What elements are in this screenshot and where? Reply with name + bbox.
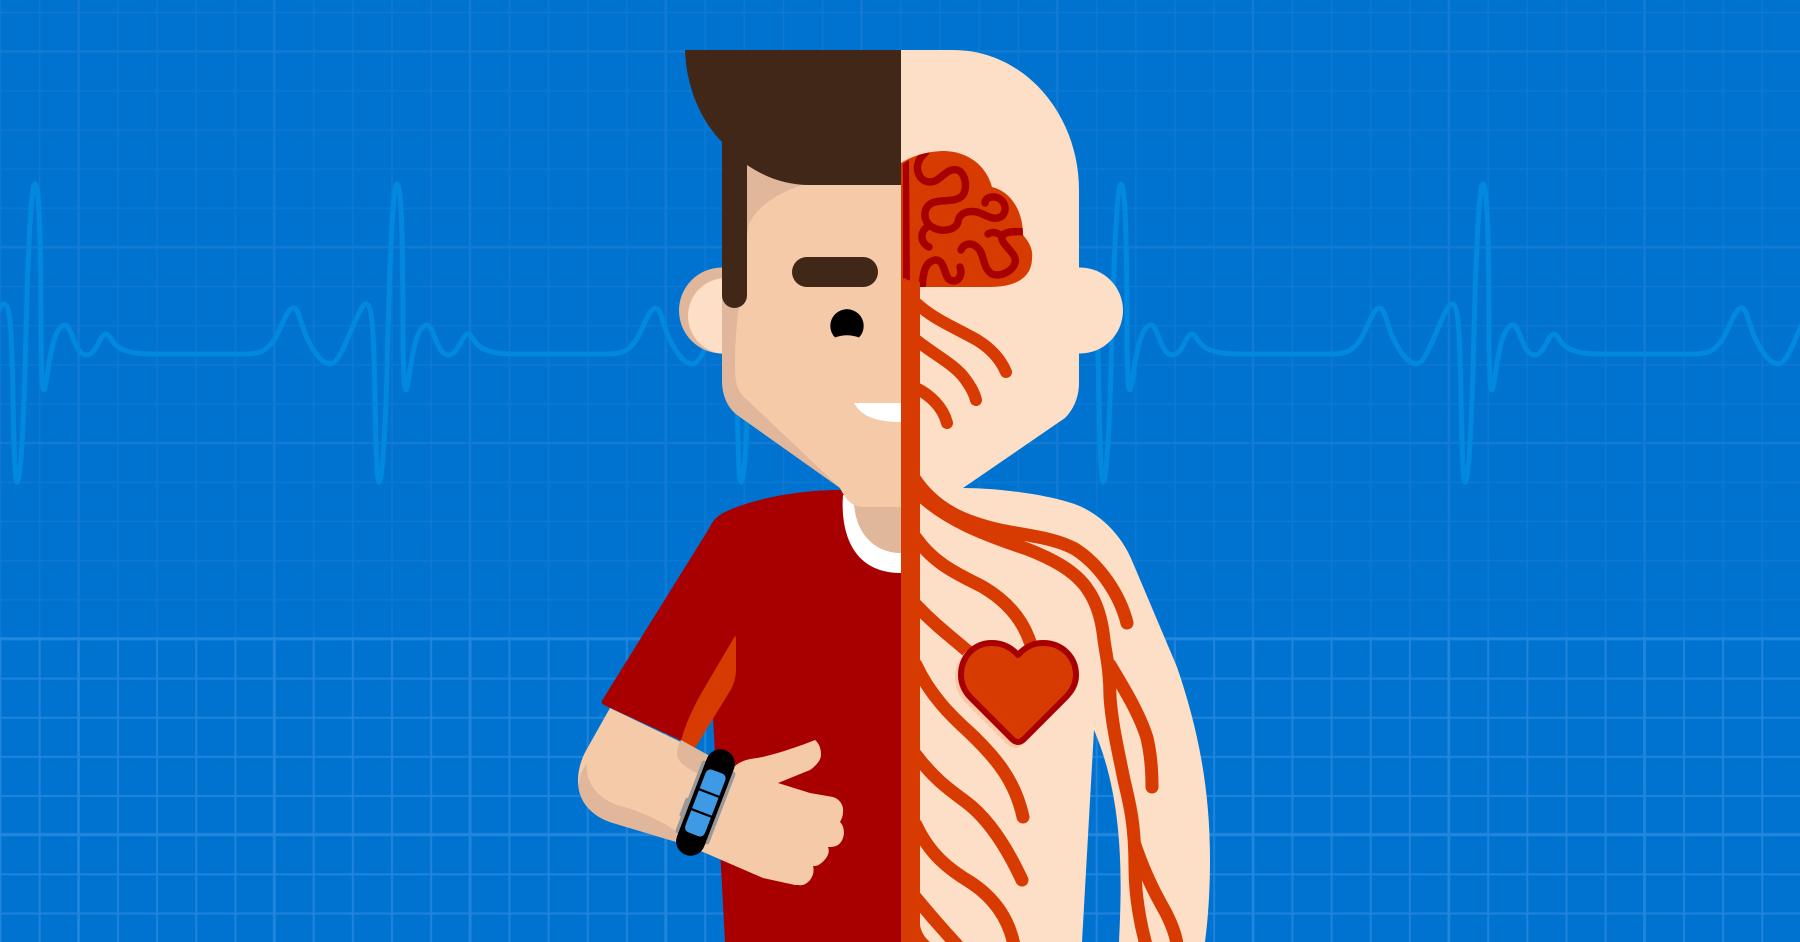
shirt bbox=[602, 489, 901, 942]
wrist shadow bbox=[677, 740, 708, 774]
arm shadow bbox=[579, 763, 677, 842]
face bbox=[735, 185, 901, 507]
fitness tracker bbox=[667, 743, 742, 861]
brain bbox=[901, 151, 1032, 289]
anatomy half: skin of head, shoulder and arm bbox=[901, 50, 1210, 942]
tracker screen bbox=[684, 768, 727, 838]
tracker clasp bbox=[673, 759, 736, 845]
eyebrow bbox=[792, 257, 878, 287]
face shadow bbox=[722, 150, 901, 507]
figure bbox=[578, 50, 1210, 942]
hair bbox=[685, 50, 901, 308]
tracker band bbox=[672, 745, 739, 860]
forearm and hand bbox=[578, 708, 844, 885]
left ear bbox=[679, 268, 722, 354]
neck bbox=[854, 500, 901, 553]
brain midline bbox=[903, 160, 910, 281]
shirt collar bbox=[843, 495, 901, 573]
veins of the torso and arm bbox=[914, 478, 1177, 942]
spine bbox=[901, 278, 942, 942]
veins of the head bbox=[916, 303, 1006, 423]
brain folds bbox=[917, 152, 1026, 289]
smile bbox=[854, 403, 901, 422]
shirt sleeve crease bbox=[681, 636, 736, 748]
eye bbox=[830, 309, 864, 338]
heartbeat line bbox=[0, 184, 1800, 482]
heart bbox=[958, 643, 1076, 745]
